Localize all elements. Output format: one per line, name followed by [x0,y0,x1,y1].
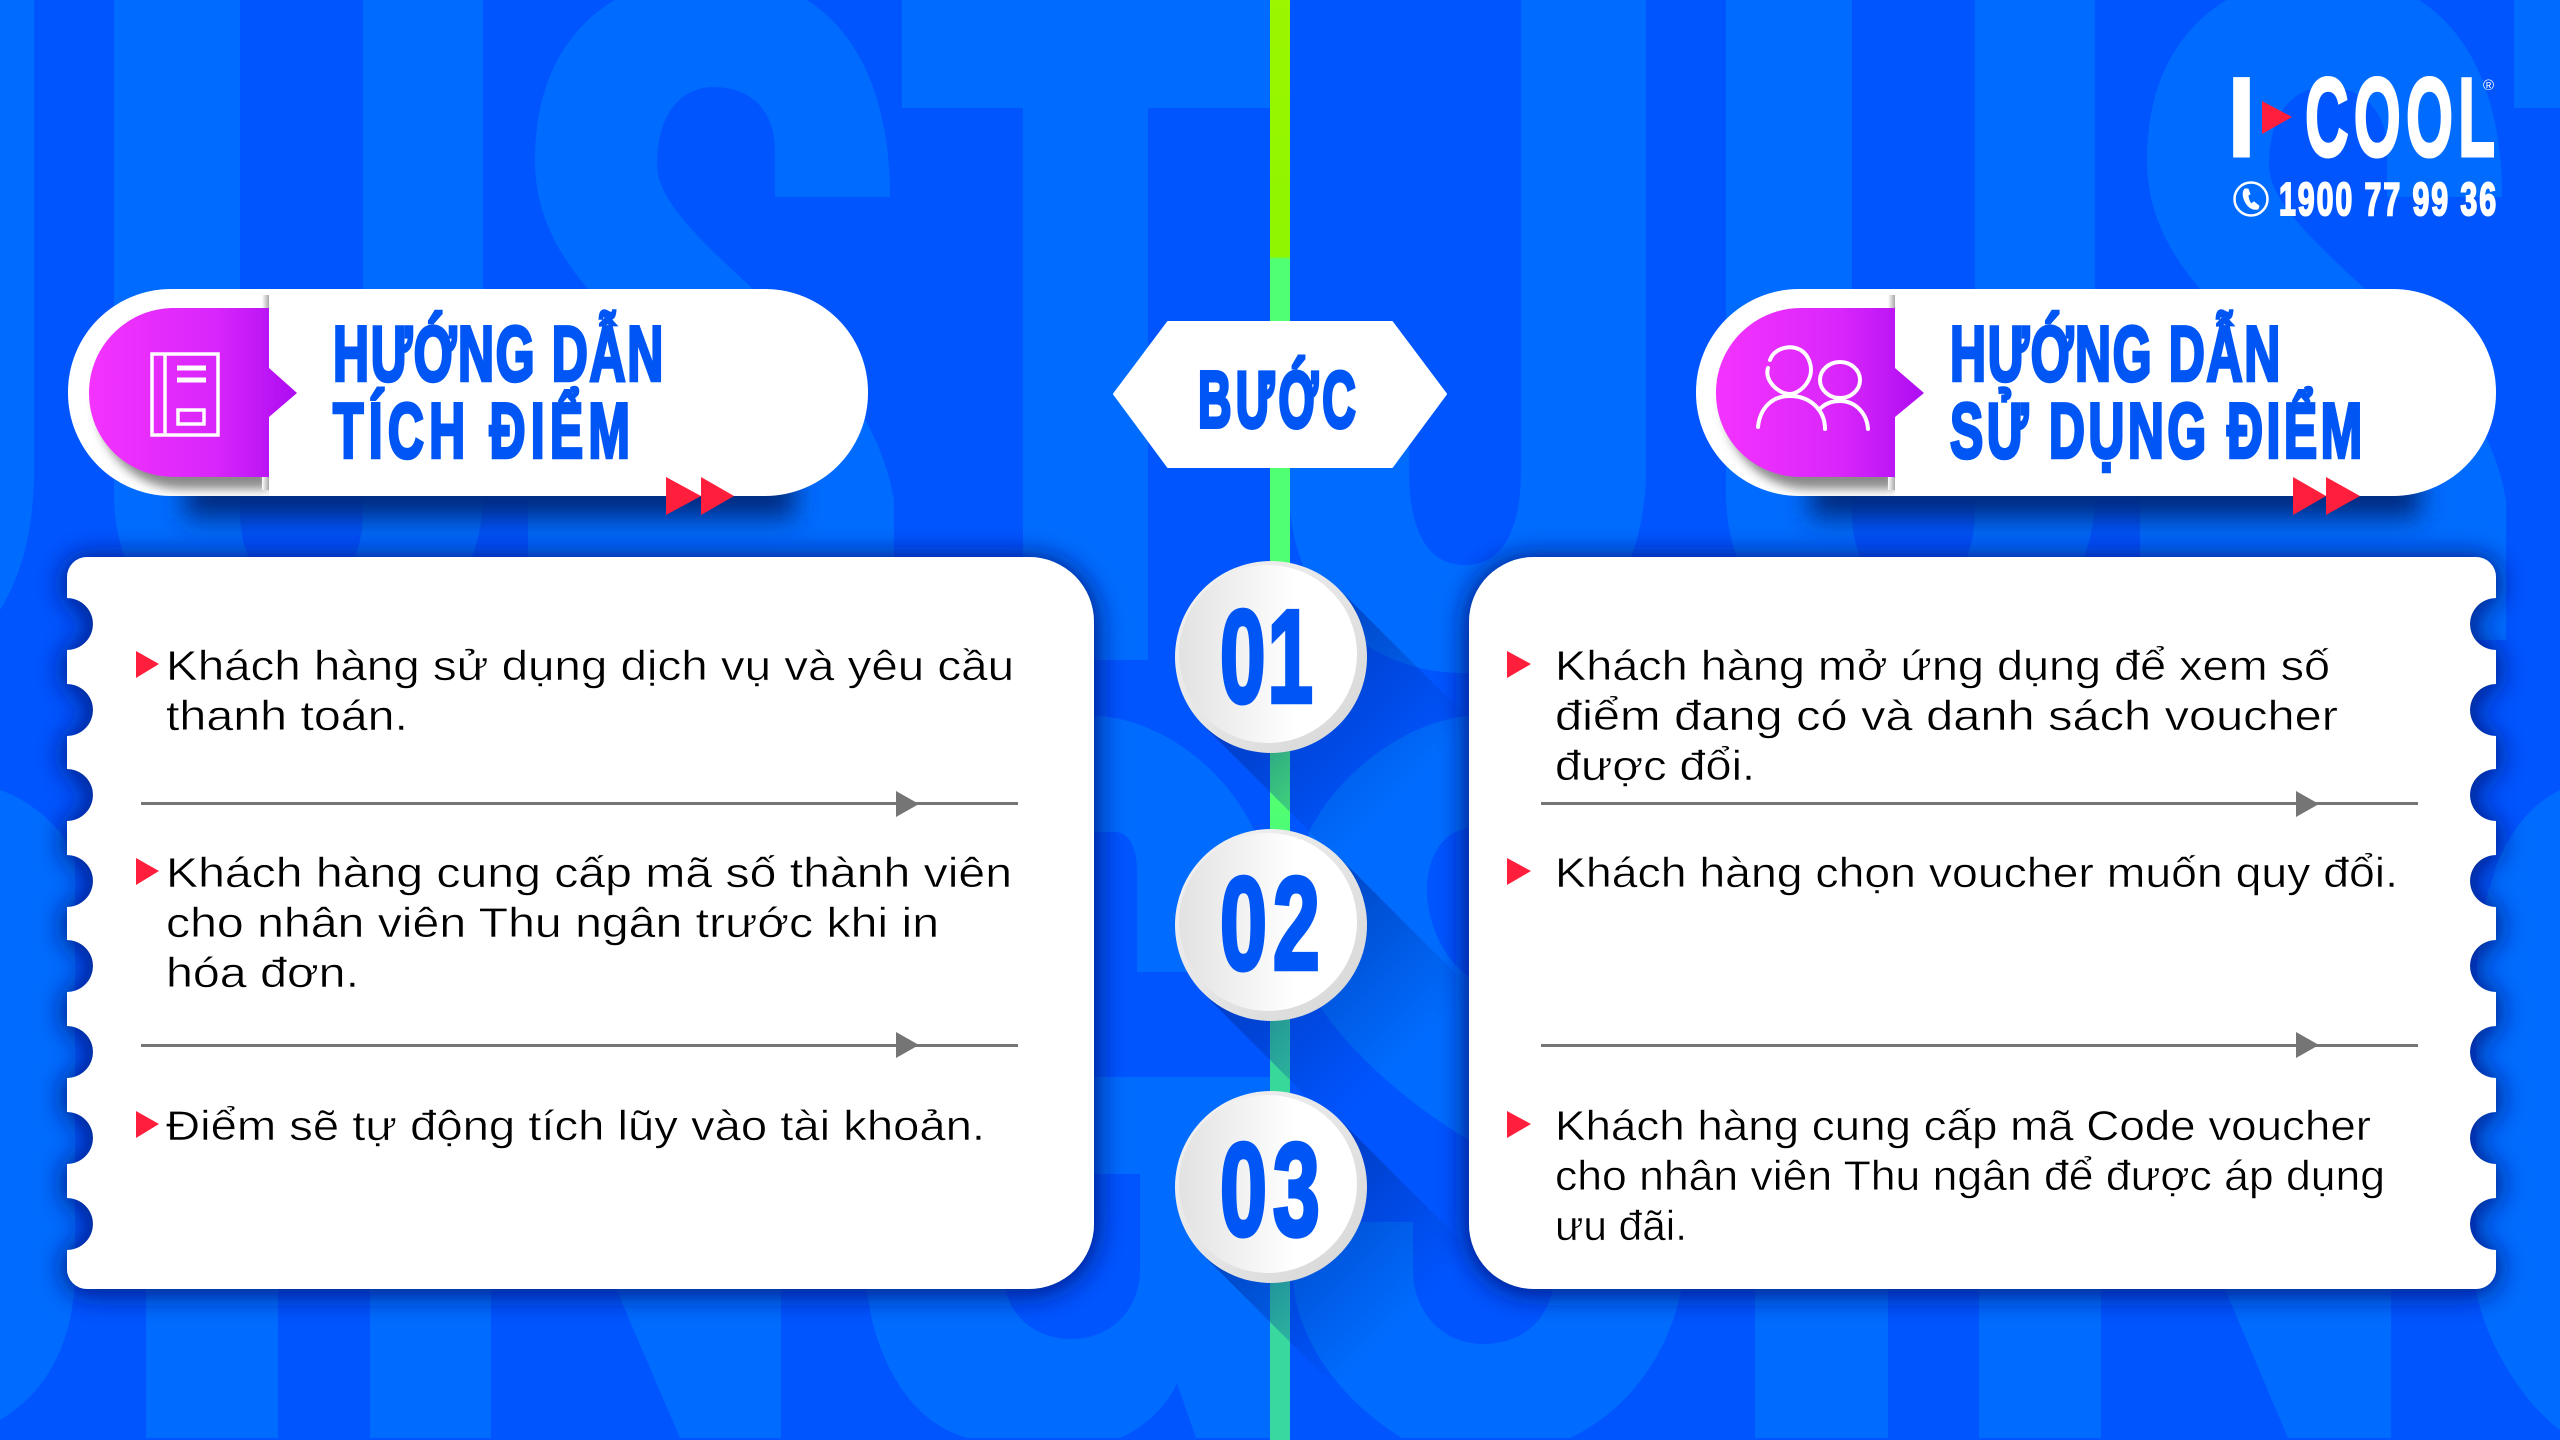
heading [1950,310,2362,474]
divider arrow 1 [141,791,1018,817]
item 1: thanh toán. [166,692,408,739]
card body with scalloped edge [67,557,1094,1289]
divider arrow 2 [141,1032,1018,1058]
step 03 [1175,1091,1367,1283]
logo wordmark: I [2228,55,2255,180]
item 2: Khách hàng chọn voucher muốn quy đổi. [1555,849,2398,896]
heading: HƯỚNG DẪN [1950,310,2280,397]
icon: people [1758,347,1868,429]
panel: right card [1469,557,2496,1289]
item 1: được đổi. [1555,742,1755,789]
item 3: ưu đãi. [1555,1202,1687,1249]
magenta tab [1716,308,1924,477]
item 2: Khách hàng cung cấp mã số thành viên [166,849,1012,896]
item 2: hóa đơn. [166,949,359,996]
double red arrows [2293,477,2360,515]
item 2: cho nhân viên Thu ngân trước khi in [166,899,939,946]
icon: notebook [152,354,218,435]
panel: left header pill [68,289,868,515]
step 01: 01 [1220,584,1313,731]
panel: left card [67,557,1094,1289]
registered mark: ® [2483,77,2494,94]
magenta tab shadow [97,295,269,490]
divider arrow 1 [1541,791,2418,817]
step 01 [1175,561,1367,753]
item 1: Khách hàng sử dụng dịch vụ và yêu cầu [166,642,1014,689]
step 03: 03 [1220,1117,1320,1264]
item 2 [136,849,1012,996]
magenta tab shadow [1724,295,1895,490]
header pill shadows [185,470,2420,518]
item 3 [1507,1102,2385,1249]
pill body [1696,289,2496,496]
hexagon label: BƯỚC: BƯỚC [1198,355,1356,444]
hexagon label: BƯỚC [1114,322,1446,467]
item 1 [136,642,1014,739]
item 3: Khách hàng cung cấp mã Code voucher [1555,1102,2371,1149]
double red arrows [666,477,734,515]
item 3: Điểm sẽ tự động tích lũy vào tài khoản. [166,1102,985,1149]
logo: I-COOL with hotline [2228,55,2496,226]
item 3: cho nhân viên Thu ngân để được áp dụng [1555,1152,2385,1199]
icon: phone [2234,182,2268,216]
logo COOL: COOL [2305,56,2495,181]
pill body [68,289,868,496]
item 1: Khách hàng mở ứng dụng để xem số [1555,642,2330,689]
heading: TÍCH ĐIỂM [333,387,630,474]
heading [333,310,663,474]
hotline number: 1900 77 99 36 [2279,175,2496,226]
magenta tab [89,308,297,477]
panel: right header pill [1696,289,2496,515]
divider arrow 2 [1541,1032,2418,1058]
item 1 [1507,642,2338,789]
heading: HƯỚNG DẪN [333,310,663,397]
step 02 [1175,829,1367,1021]
long shadows of step circles [1203,589,1509,1425]
card body with scalloped edge [1469,557,2496,1289]
item 1: điểm đang có và danh sách voucher [1555,692,2338,739]
heading: SỬ DỤNG ĐIỂM [1950,387,2362,474]
center timeline line [1270,0,1290,1440]
step 02: 02 [1220,851,1320,998]
logo play triangle [2262,101,2292,134]
